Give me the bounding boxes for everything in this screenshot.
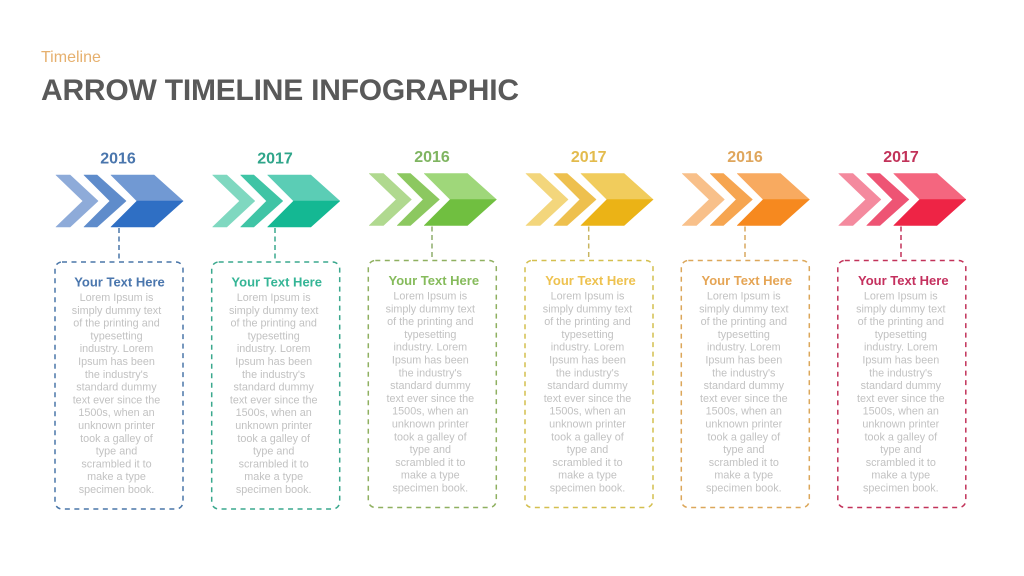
year: 2016 (414, 149, 450, 166)
panel body: unknown printer (78, 420, 155, 432)
icon: triple chevron arrow (213, 175, 340, 227)
panel body: scrambled it to (239, 458, 309, 470)
panel body: typesetting (248, 330, 300, 342)
panel body: type and (253, 446, 294, 458)
column 2: 2017 teal (212, 150, 340, 509)
panel body: scrambled it to (395, 457, 465, 469)
panel body: type and (96, 446, 137, 458)
panel body: of the printing and (701, 316, 787, 328)
panel body: type and (410, 444, 451, 456)
panel body: scrambled it to (866, 457, 936, 469)
panel body: make a type (244, 471, 303, 483)
column 3: 2016 green (368, 149, 496, 508)
panel body: standard dummy (704, 380, 785, 392)
text panel (55, 262, 183, 509)
panel body: simply dummy text (386, 303, 475, 315)
panel body: took a galley of (551, 431, 625, 443)
panel body: the industry's (85, 369, 149, 381)
connector (274, 228, 276, 262)
panel body: industry. Lorem (393, 342, 467, 354)
panel body: type and (880, 444, 922, 456)
panel body: text ever since the (73, 394, 160, 406)
panel body: of the printing and (544, 316, 631, 328)
panel body: specimen book. (79, 484, 154, 496)
panel body: industry. Lorem (707, 342, 781, 354)
panel body: simply dummy text (856, 303, 945, 315)
panel body: standard dummy (76, 382, 157, 394)
panel body: typesetting (561, 329, 614, 341)
panel body: 1500s, when an (706, 406, 782, 418)
panel heading: Your Text Here (231, 274, 322, 290)
panel body: type and (567, 444, 608, 456)
icon: triple chevron arrow (839, 174, 966, 226)
panel body: Ipsum has been (392, 354, 469, 366)
panel body: specimen book. (392, 482, 468, 494)
panel body: standard dummy (233, 382, 315, 394)
connector (744, 226, 746, 260)
panel body: scrambled it to (552, 457, 623, 469)
panel body: make a type (87, 471, 146, 483)
panel heading: Your Text Here (389, 273, 479, 288)
panel body: 1500s, when an (863, 406, 939, 418)
panel body: Ipsum has been (549, 354, 626, 366)
panel body: Lorem Ipsum is (237, 292, 311, 304)
panel body: the industry's (869, 367, 933, 379)
panel body: typesetting (404, 329, 456, 341)
panel body: Ipsum has been (235, 356, 312, 368)
panel body: took a galley of (237, 433, 311, 445)
panel body: the industry's (556, 367, 620, 379)
text panel (212, 262, 340, 509)
text panel (525, 260, 653, 508)
panel body: Lorem Ipsum is (393, 290, 468, 302)
panel body: specimen book. (706, 482, 782, 494)
panel body: simply dummy text (229, 305, 318, 317)
year: 2016 (100, 150, 136, 168)
panel body: took a galley of (864, 431, 938, 443)
panel body: make a type (401, 470, 460, 482)
panel heading: Your Text Here (74, 274, 165, 290)
icon: triple chevron arrow (369, 174, 496, 226)
text panel (681, 260, 809, 508)
icon: triple chevron arrow (682, 174, 809, 226)
panel body: typesetting (90, 330, 143, 342)
column 1: 2016 blue (55, 150, 183, 509)
panel body: 1500s, when an (549, 406, 626, 418)
panel body: industry. Lorem (551, 342, 624, 354)
panel body: simply dummy text (543, 303, 632, 315)
eyebrow: Timeline: Timeline (41, 49, 101, 66)
connector (431, 226, 433, 260)
year: 2017 (883, 149, 919, 166)
panel body: industry. Lorem (864, 342, 938, 354)
panel body: standard dummy (390, 380, 471, 392)
column 6: 2017 red (838, 149, 966, 508)
connector (118, 228, 120, 262)
panel body: industry. Lorem (237, 343, 311, 355)
panel body: Lorem Ipsum is (707, 290, 781, 302)
panel body: typesetting (875, 329, 927, 341)
panel body: Lorem Ipsum is (551, 290, 625, 302)
icon: triple chevron arrow (56, 175, 183, 227)
panel heading: Your Text Here (702, 273, 792, 288)
panel body: Ipsum has been (862, 354, 939, 366)
panel body: simply dummy text (72, 305, 161, 317)
panel body: Lorem Ipsum is (80, 292, 154, 304)
panel body: text ever since the (386, 393, 474, 405)
panel body: standard dummy (861, 380, 942, 392)
panel body: specimen book. (236, 484, 312, 496)
panel body: Ipsum has been (705, 354, 782, 366)
panel heading: Your Text Here (858, 273, 949, 288)
panel body: text ever since the (700, 393, 788, 405)
panel body: standard dummy (547, 380, 628, 392)
text panel (368, 260, 496, 508)
panel body: make a type (558, 470, 617, 482)
icon: triple chevron arrow (526, 174, 653, 226)
panel body: took a galley of (80, 433, 154, 445)
panel body: text ever since the (544, 393, 631, 405)
panel body: type and (723, 444, 765, 456)
panel body: scrambled it to (81, 458, 152, 470)
title: ARROW TIMELINE INFOGRAPHIC (41, 74, 519, 107)
panel body: took a galley of (394, 431, 468, 443)
panel body: unknown printer (235, 420, 313, 432)
column 5: 2016 orange (681, 149, 809, 508)
panel body: simply dummy text (699, 303, 788, 315)
panel body: text ever since the (230, 394, 318, 406)
panel body: unknown printer (549, 418, 626, 430)
panel body: 1500s, when an (392, 406, 468, 418)
panel body: the industry's (242, 369, 306, 381)
column 4: 2017 yellow (525, 149, 653, 508)
text panel (838, 260, 966, 508)
panel body: of the printing and (230, 318, 317, 330)
panel body: specimen book. (863, 482, 939, 494)
panel body: make a type (871, 470, 930, 482)
panel body: the industry's (712, 367, 776, 379)
panel body: unknown printer (705, 418, 783, 430)
panel body: specimen book. (550, 482, 625, 494)
panel body: unknown printer (862, 418, 940, 430)
connector (588, 226, 590, 260)
year: 2017 (571, 149, 607, 166)
panel body: 1500s, when an (78, 407, 155, 419)
panel body: scrambled it to (709, 457, 779, 469)
panel heading: Your Text Here (545, 273, 636, 288)
year: 2017 (257, 150, 293, 168)
panel body: Ipsum has been (78, 356, 155, 368)
panel body: industry. Lorem (80, 343, 153, 355)
panel body: took a galley of (707, 431, 781, 443)
panel body: of the printing and (858, 316, 944, 328)
panel body: text ever since the (857, 393, 945, 405)
connector (900, 226, 902, 260)
panel body: unknown printer (392, 418, 469, 430)
panel body: the industry's (399, 367, 463, 379)
panel body: make a type (714, 470, 773, 482)
panel body: 1500s, when an (236, 407, 312, 419)
panel body: Lorem Ipsum is (864, 290, 938, 302)
panel body: of the printing and (387, 316, 474, 328)
panel body: of the printing and (73, 318, 160, 330)
year: 2016 (727, 149, 763, 166)
panel body: typesetting (718, 329, 770, 341)
